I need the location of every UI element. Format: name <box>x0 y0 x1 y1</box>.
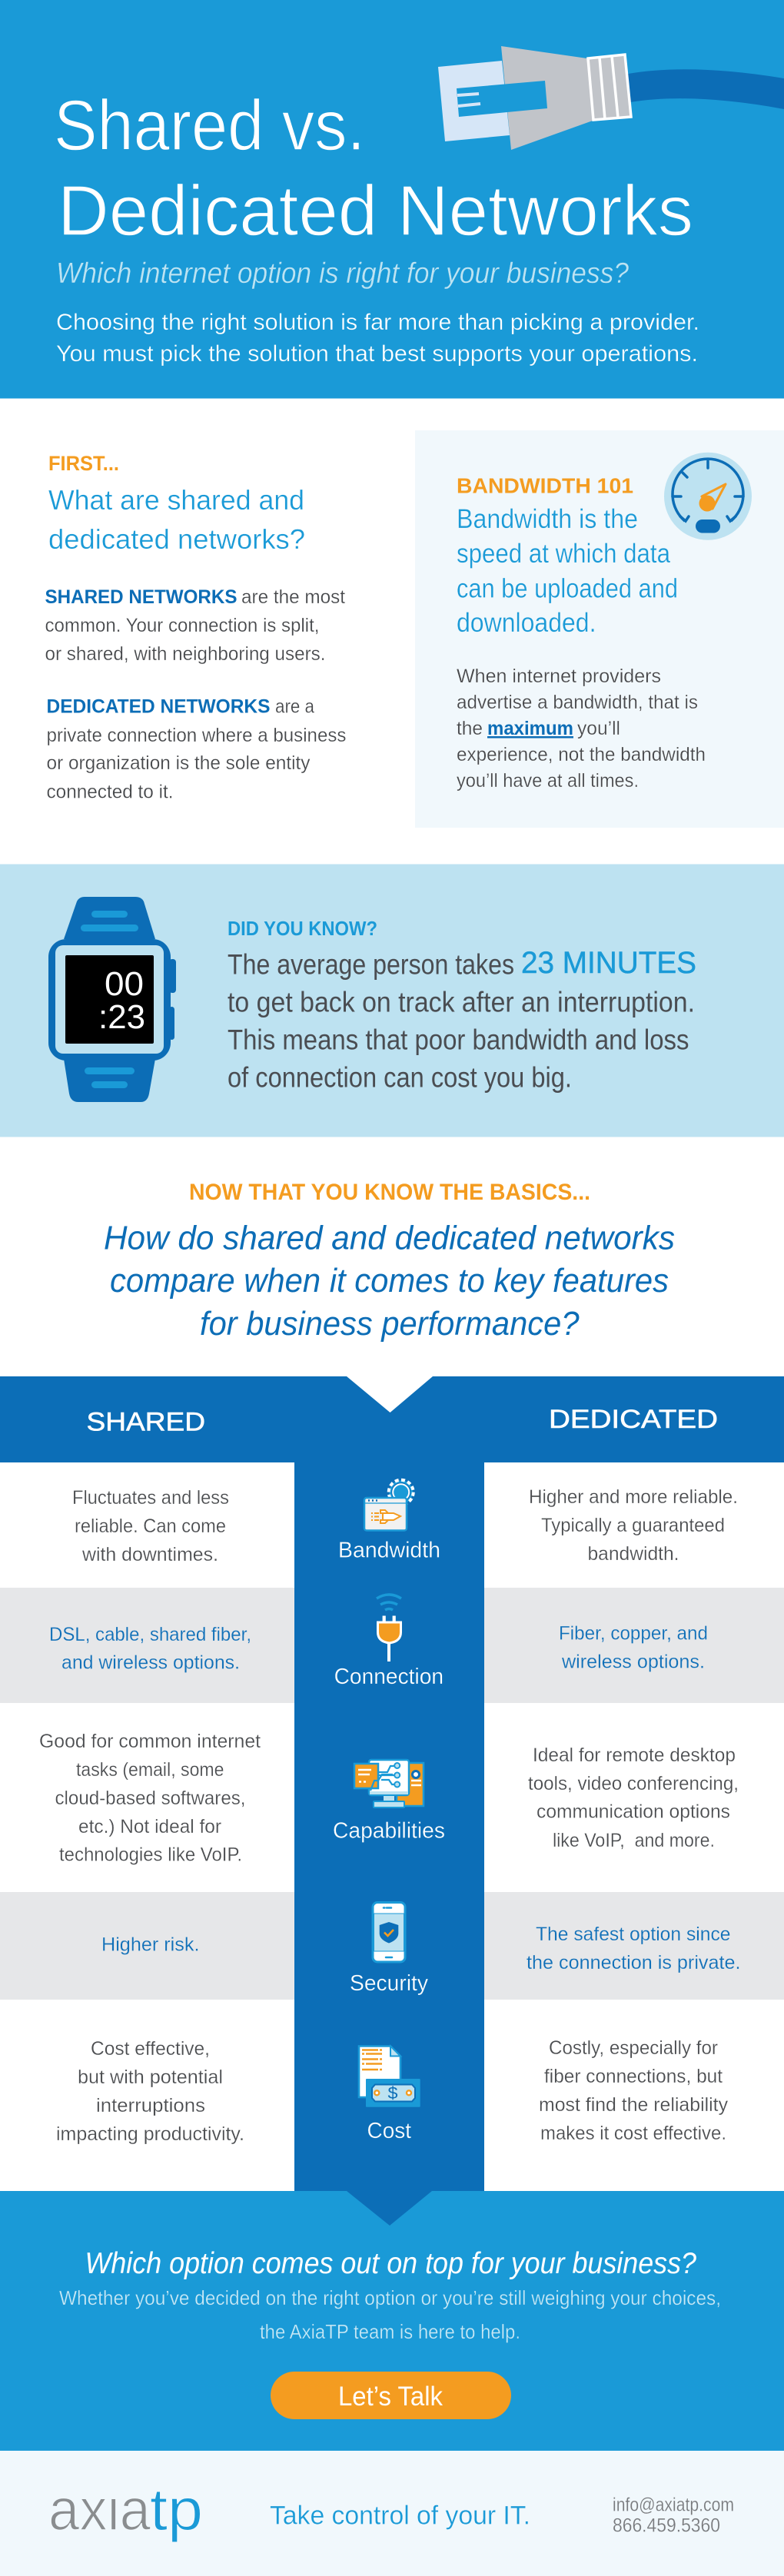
intro text <box>56 310 699 367</box>
intro text: Choosing the right solution is far more than picking a provider. <box>56 310 699 335</box>
dedicated security text: the connection is private. <box>527 1952 741 1973</box>
dedicated connection text <box>559 1623 708 1672</box>
heading: comparison question: How do shared and dedicated networks <box>104 1219 675 1257</box>
text: dedicated networks definition: are a <box>275 696 314 718</box>
logo: axiatp: tp <box>150 2477 203 2543</box>
text: shared networks definition: are the most <box>241 586 345 608</box>
icon: browser window with rocket and gear <box>364 1480 414 1531</box>
icon: network cable plug <box>438 46 784 150</box>
text: bandwidth explanation: When internet providers <box>457 666 661 687</box>
eyebrow: first: FIRST... <box>48 452 119 475</box>
icon: smart watch showing 00:23: 00 <box>105 965 144 1003</box>
label: cost: Cost <box>367 2119 411 2143</box>
panel: comparison table <box>0 1376 784 2191</box>
panel: comparison intro <box>104 1180 675 1343</box>
text: shared networks definition: or shared, with neighboring users. <box>45 643 326 665</box>
shared capabilities text: technologies like VoIP. <box>59 1844 242 1866</box>
text: bandwidth explanation: maximum <box>487 718 573 739</box>
heading: what are shared and dedicated networks: dedicated networks? <box>48 523 305 555</box>
table header and centre column <box>0 1376 784 2191</box>
panel: footer <box>0 2451 784 2576</box>
dedicated cost text: makes it cost effective. <box>540 2123 726 2144</box>
shared capabilities text <box>39 1731 261 1866</box>
fact text: This means that poor bandwidth and loss <box>228 1024 689 1056</box>
text: bandwidth explanation: you’ll have at all times. <box>457 770 639 792</box>
contact details: info@axiatp.com <box>613 2495 734 2516</box>
panel: header <box>0 0 784 398</box>
fact text <box>228 946 696 1093</box>
heading: bandwidth definition: speed at which data <box>457 539 670 569</box>
eyebrow: did you know: DID YOU KNOW? <box>228 917 377 940</box>
button: let's talk <box>271 2372 511 2419</box>
icon: computer and circuits <box>354 1760 424 1808</box>
shared capabilities text: etc.) Not ideal for <box>78 1816 221 1837</box>
dedicated connection text: Fiber, copper, and <box>559 1623 708 1645</box>
row: cost <box>56 2037 728 2145</box>
text: call to action description: the AxiaTP team is here to help. <box>260 2320 520 2343</box>
heading: bandwidth definition: can be uploaded and <box>457 573 678 604</box>
dedicated security text: The safest option since <box>536 1924 730 1945</box>
shared bandwidth text: with downtimes. <box>81 1544 218 1565</box>
panel: what are shared and dedicated networks <box>45 452 346 802</box>
title: Dedicated Networks <box>58 171 693 251</box>
icon: smart watch showing 00:23: :23 <box>98 998 145 1036</box>
text: bandwidth explanation: advertise a bandwidth, that is <box>457 692 698 713</box>
label: bandwidth: Bandwidth <box>338 1539 440 1563</box>
icon: phone with shield <box>373 1903 405 1962</box>
heading: bandwidth definition: downloaded. <box>457 608 596 638</box>
dedicated cost text <box>539 2037 728 2144</box>
shared capabilities text: tasks (email, some <box>76 1759 224 1781</box>
eyebrow: now that you know the basics: NOW THAT YOU KNOW THE BASICS... <box>189 1180 590 1205</box>
dedicated capabilities text <box>528 1744 739 1851</box>
dedicated bandwidth text <box>529 1486 738 1565</box>
heading: comparison question <box>104 1219 675 1343</box>
text: dedicated networks definition: or organization is the sole entity <box>46 752 311 774</box>
text: dedicated networks definition: connected to it. <box>46 781 174 802</box>
text: dedicated networks definition: private connection where a business <box>46 725 346 746</box>
fact text: to get back on track after an interruption. <box>228 987 695 1017</box>
text: shared networks definition: common. Your connection is split, <box>45 615 320 636</box>
shared connection text: and wireless options. <box>61 1652 240 1674</box>
icon: document and banknote: $ <box>387 2083 398 2103</box>
shared bandwidth text: reliable. Can come <box>75 1515 226 1537</box>
dedicated bandwidth text: Higher and more reliable. <box>529 1486 738 1508</box>
panel: call to action <box>0 2191 784 2451</box>
label: security: Security <box>350 1971 428 1996</box>
contact details <box>613 2495 734 2536</box>
icon: smart watch showing 00:23 <box>48 897 176 1102</box>
column heading: shared: SHARED <box>86 1408 205 1437</box>
label: connection: Connection <box>334 1665 443 1689</box>
shared bandwidth text <box>72 1487 229 1565</box>
dedicated connection text: wireless options. <box>561 1651 705 1672</box>
shared capabilities text: Good for common internet <box>39 1731 261 1752</box>
shared security text: Higher risk. <box>101 1934 200 1955</box>
dedicated capabilities text: communication options <box>537 1801 730 1823</box>
shared connection text: DSL, cable, shared fiber, <box>49 1624 251 1645</box>
fact text: 23 MINUTES <box>521 946 696 980</box>
row: connection <box>49 1595 708 1689</box>
icon: speed gauge <box>664 453 752 540</box>
shared capabilities text: cloud-based softwares, <box>55 1788 246 1809</box>
text: bandwidth explanation: the <box>457 718 483 739</box>
text: bandwidth explanation <box>457 666 706 792</box>
dedicated cost text: fiber connections, but <box>544 2066 723 2087</box>
heading: bandwidth definition <box>457 504 678 638</box>
shared connection text <box>49 1624 251 1674</box>
text: call to action description <box>59 2286 721 2343</box>
dedicated cost text: Costly, especially for <box>549 2037 718 2059</box>
dedicated capabilities text: tools, video conferencing, <box>528 1773 739 1794</box>
heading: what are shared and dedicated networks: What are shared and <box>48 484 304 516</box>
title <box>54 85 693 251</box>
dedicated capabilities text: like VoIP, and more. <box>553 1830 715 1851</box>
panel: did you know <box>0 864 784 1137</box>
column heading: dedicated: DEDICATED <box>549 1405 718 1434</box>
shared bandwidth text: Fluctuates and less <box>72 1487 229 1509</box>
heading: what are shared and dedicated networks <box>48 484 305 555</box>
dedicated capabilities text: Ideal for remote desktop <box>533 1744 736 1766</box>
title: Shared vs. <box>54 85 365 165</box>
label: capabilities: Capabilities <box>333 1818 445 1843</box>
text: dedicated networks definition <box>46 696 346 802</box>
dedicated cost text: most find the reliability <box>539 2094 728 2116</box>
heading: comparison question: for business performance? <box>200 1305 580 1343</box>
button: let's talk: Let’s Talk <box>338 2382 443 2412</box>
row: security <box>101 1903 741 1996</box>
row: bandwidth <box>72 1480 738 1565</box>
shared cost text <box>56 2038 244 2145</box>
text: call to action description: Whether you’ve decided on the right option or you’re still weighing your choices, <box>59 2286 721 2309</box>
eyebrow: bandwidth 101: BANDWIDTH 101 <box>457 473 633 498</box>
icon: plug with wifi <box>377 1595 401 1661</box>
text: shared networks definition: SHARED NETWORKS <box>45 586 237 608</box>
tagline: Take control of your IT. <box>270 2501 530 2530</box>
dedicated bandwidth text: Typically a guaranteed <box>541 1515 725 1536</box>
fact text: of connection can cost you big. <box>228 1062 572 1093</box>
text: dedicated networks definition: DEDICATED NETWORKS <box>46 696 271 718</box>
table rows background <box>0 1588 784 2000</box>
panel: bandwidth 101 <box>415 430 784 828</box>
fact text: The average person takes <box>228 948 514 981</box>
text: bandwidth explanation: you’ll <box>577 718 620 739</box>
subtitle: Which internet option is right for your business? <box>56 257 630 290</box>
intro text: You must pick the solution that best supports your operations. <box>56 341 698 367</box>
shared cost text: Cost effective, <box>91 2038 210 2060</box>
logo: axiatp: axia <box>48 2477 151 2543</box>
shared cost text: interruptions <box>96 2095 205 2116</box>
contact details: 866.459.5360 <box>613 2515 720 2536</box>
dedicated security text <box>527 1924 741 1973</box>
shared cost text: but with potential <box>78 2066 223 2088</box>
arrow: down from table <box>347 2191 432 2226</box>
text: bandwidth explanation: experience, not the bandwidth <box>457 744 706 765</box>
row: capabilities <box>39 1731 739 1866</box>
heading: bandwidth definition: Bandwidth is the <box>457 504 638 534</box>
heading: which option comes out on top: Which option comes out on top for your business? <box>85 2247 696 2280</box>
dedicated bandwidth text: bandwidth. <box>587 1543 679 1565</box>
text: shared networks definition <box>45 586 345 665</box>
icon: document and banknote <box>359 2046 420 2107</box>
heading: comparison question: compare when it comes to key features <box>110 1262 669 1300</box>
shared cost text: impacting productivity. <box>56 2123 244 2145</box>
